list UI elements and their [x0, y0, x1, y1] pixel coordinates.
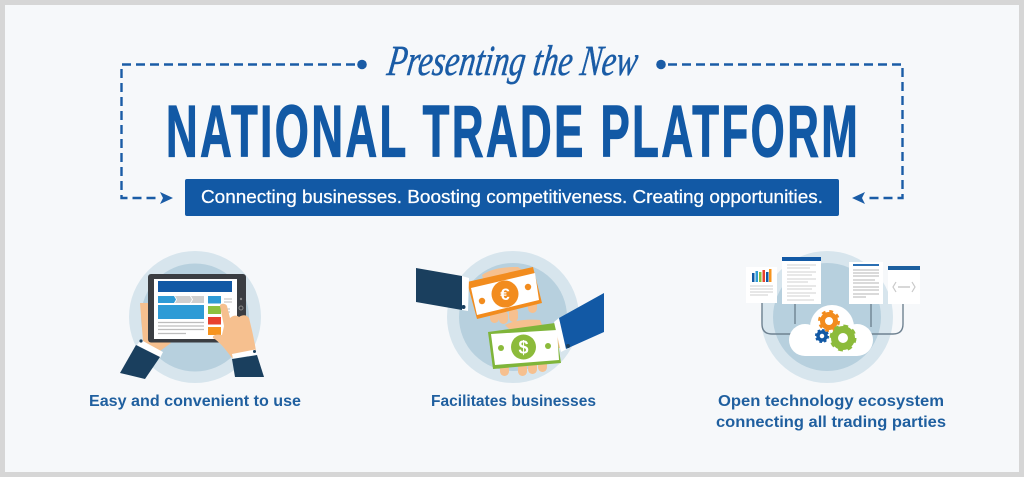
gear: green [832, 326, 854, 350]
document: code [888, 266, 920, 304]
label: open technology ecosystem: Open technology ecosystem [718, 393, 944, 410]
dashed frame: left with arrow [122, 60, 367, 204]
tagline banner: Connecting businesses. Boosting competitiveness. Creating opportunities. [201, 187, 823, 207]
gear: blue [816, 330, 828, 342]
label: easy and convenient: Easy and convenient to use [89, 393, 301, 410]
tagline banner [185, 179, 839, 216]
label: facilitates businesses: Facilitates businesses [431, 393, 596, 410]
gear: orange [820, 312, 838, 330]
dashed frame: right with arrow [656, 60, 902, 204]
icon: hands exchanging banknotes [416, 251, 604, 383]
icon: hands exchanging banknotes: $ [518, 338, 529, 358]
icon: cloud connected to documents [746, 251, 920, 383]
label: open technology ecosystem [716, 393, 946, 431]
document: text two [849, 262, 883, 304]
document: chart [746, 267, 777, 303]
script heading: Presenting the New [384, 37, 641, 85]
title: NATIONAL TRADE PLATFORM [166, 91, 858, 172]
icon: hands exchanging banknotes: € [500, 285, 510, 304]
cloud [789, 305, 873, 356]
document: text one [782, 257, 821, 304]
label: open technology ecosystem: connecting all trading parties [716, 414, 946, 431]
icon: tablet with hands [120, 251, 264, 383]
